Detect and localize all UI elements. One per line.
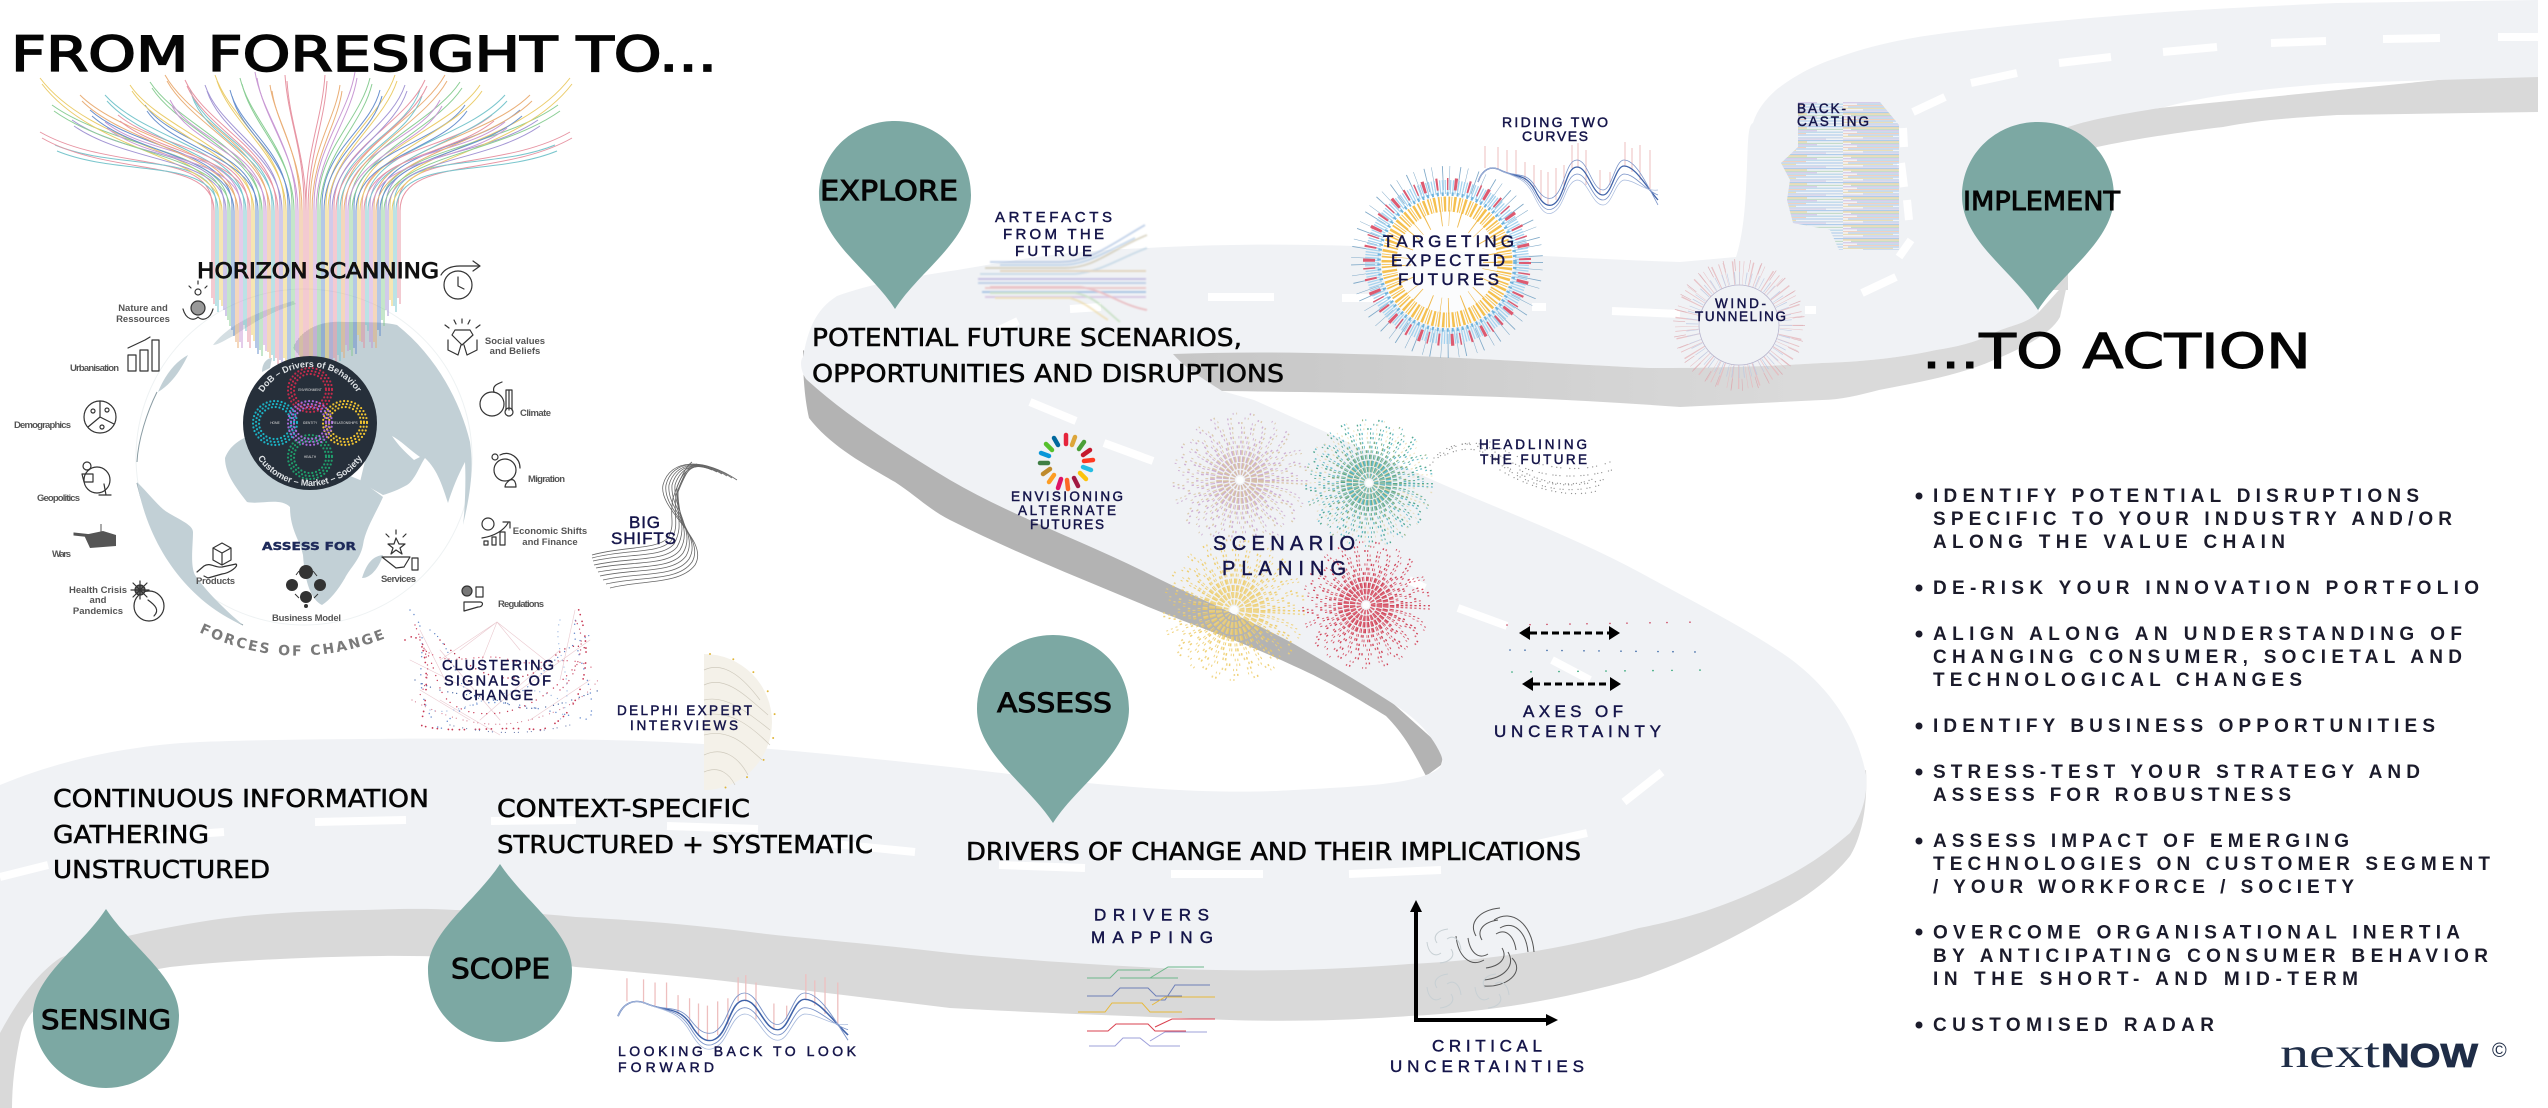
label: forces of change arc: FORCES OF CHANGE xyxy=(200,623,384,656)
assess for: heading: ASSESS FOR xyxy=(262,540,357,553)
label: clustering signals of change: CHANGE xyxy=(462,688,533,704)
diagram: drivers of behavior disc: RELATIONSHIPS xyxy=(332,421,358,425)
label: artefacts from the futrue: FUTRUE xyxy=(1015,243,1092,260)
road: centre line dashes xyxy=(0,37,2538,877)
label: clustering signals of change xyxy=(442,658,554,704)
logo: nextnow xyxy=(2280,1031,2507,1077)
forces of change: urbanisation xyxy=(70,337,159,374)
pin: implement: IMPLEMENT xyxy=(1963,187,2120,217)
label: wind-tunneling xyxy=(1695,296,1786,324)
label: headlining the future: HEADLINING xyxy=(1479,437,1587,452)
label: big shifts xyxy=(611,513,676,548)
label: targeting expected futures: FUTURES xyxy=(1398,270,1499,289)
list: benefits: CUSTOMISED RADAR xyxy=(1933,1015,2214,1036)
label: critical uncertainties: UNCERTAINTIES xyxy=(1390,1057,1584,1076)
text: context-specific: CONTEXT-SPECIFIC xyxy=(497,794,750,823)
label: looking back to look forward: LOOKING BACK TO LOOK xyxy=(618,1043,857,1059)
chart: drivers mapping circuit lines xyxy=(1078,967,1215,1046)
forces of change: demographics xyxy=(14,401,116,433)
pin: assess xyxy=(977,635,1129,823)
road: side band of top right road xyxy=(2030,70,2538,290)
forces of change: health crisis and pandemics xyxy=(69,581,164,621)
diagram: drivers of behavior disc: HEALTH xyxy=(304,455,317,459)
forces of change: health crisis and pandemics: Pandemics xyxy=(73,606,123,617)
label: targeting expected futures: EXPECTED xyxy=(1391,251,1505,270)
forces of change: nature and ressources xyxy=(116,281,213,325)
forces of change: regulations: Regulations xyxy=(498,599,544,610)
label: envisioning alternate futures xyxy=(1011,489,1123,532)
text: continuous information xyxy=(53,784,429,884)
chart: big shifts wave xyxy=(592,462,737,588)
chart: targeting expected futures xyxy=(1363,178,1531,346)
logo: nextnow: © xyxy=(2492,1040,2507,1062)
forces of change: geopolitics xyxy=(37,462,111,504)
assess for: business model: Business Model xyxy=(272,613,341,624)
list: benefits: ASSESS IMPACT OF EMERGING xyxy=(1933,831,2349,852)
label: artefacts from the futrue: FROM THE xyxy=(1003,226,1104,243)
assess for: business model xyxy=(272,565,341,624)
text: potential future scenarios: OPPORTUNITIES AND DISRUPTIONS xyxy=(812,359,1284,388)
title: to action: ...TO ACTION xyxy=(1922,324,2311,380)
pin: scope xyxy=(428,864,572,1042)
label: axes of uncertainty: UNCERTAINTY xyxy=(1494,722,1661,741)
label: envisioning alternate futures: ENVISIONING xyxy=(1011,489,1123,504)
label: artefacts from the futrue: ARTEFACTS xyxy=(995,209,1112,226)
label: delphi expert interviews xyxy=(617,703,752,733)
label: clustering signals of change: SIGNALS OF xyxy=(444,674,551,690)
chart: looking back to look forward xyxy=(618,974,848,1049)
diagram: drivers of behavior disc xyxy=(243,356,377,490)
text: continuous information: CONTINUOUS INFORMATION xyxy=(53,784,429,813)
pin: assess: ASSESS xyxy=(997,688,1112,719)
forces of change: social values and beliefs xyxy=(445,319,545,357)
text: potential future scenarios xyxy=(812,323,1284,388)
chart: headlining the future xyxy=(1430,442,1612,494)
assess for: products xyxy=(196,543,237,587)
label: riding two curves: CURVES xyxy=(1522,128,1588,144)
forces of change: economic shifts and finance: and Finance xyxy=(522,537,578,548)
label: delphi expert interviews: DELPHI EXPERT xyxy=(617,703,752,718)
road: side band of diagonal xyxy=(803,350,1445,776)
chart: scenario firework purple xyxy=(1170,410,1310,550)
pin: implement xyxy=(1962,122,2120,310)
label: targeting expected futures: TARGETING xyxy=(1383,232,1514,251)
label: drivers mapping xyxy=(1091,906,1213,947)
label: envisioning alternate futures: ALTERNATE xyxy=(1018,503,1116,518)
label: delphi expert interviews: INTERVIEWS xyxy=(630,718,738,733)
label: wind-tunneling: TUNNELING xyxy=(1695,309,1786,324)
label: headlining the future xyxy=(1479,437,1587,467)
text: continuous information: GATHERING xyxy=(53,820,209,849)
title: from foresight to: FROM FORESIGHT TO... xyxy=(11,27,717,83)
list: benefits: / YOUR WORKFORCE / SOCIETY xyxy=(1933,877,2354,898)
list: benefits: STRESS-TEST YOUR STRATEGY AND xyxy=(1933,762,2420,783)
icon: clock with arrow xyxy=(441,261,480,299)
list: benefits: ALIGN ALONG AN UNDERSTANDING OF xyxy=(1933,624,2462,645)
forces of change: climate xyxy=(480,382,551,419)
label: back-casting: BACK- xyxy=(1797,101,1846,116)
list: benefits: IDENTIFY BUSINESS OPPORTUNITIES xyxy=(1933,716,2435,737)
list: benefits: TECHNOLOGIES ON CUSTOMER SEGMENT xyxy=(1933,854,2490,875)
label: big shifts: BIG xyxy=(629,513,660,532)
label: headlining the future: THE FUTURE xyxy=(1480,452,1587,467)
logo: nextnow: NOW xyxy=(2381,1037,2479,1074)
icon: globe xyxy=(136,289,472,625)
logo: nextnow: next xyxy=(2280,1031,2380,1077)
list: benefits: IDENTIFY POTENTIAL DISRUPTIONS xyxy=(1933,486,2419,507)
label: looking back to look forward: FORWARD xyxy=(618,1059,714,1075)
chart: scenario firework teal xyxy=(1288,402,1450,564)
text: potential future scenarios: POTENTIAL FUTURE SCENARIOS, xyxy=(812,323,1242,352)
forces of change: wars: Wars xyxy=(52,549,71,560)
label: looking back to look forward xyxy=(618,1043,857,1075)
label: back-casting: CASTING xyxy=(1797,114,1869,129)
chart: backcasting head xyxy=(1780,100,1900,252)
pin: sensing: SENSING xyxy=(41,1005,171,1036)
forces of change: migration xyxy=(492,453,565,487)
diagram: drivers of behavior disc: IDENTITY xyxy=(303,421,318,425)
chart: horizon scanning fan of lines xyxy=(40,72,572,378)
list: benefits: OVERCOME ORGANISATIONAL INERTIA xyxy=(1933,922,2460,944)
forces of change: economic shifts and finance: Economic Shifts xyxy=(513,526,587,537)
icon: envisioning alternate futures ring xyxy=(1040,435,1093,489)
forces of change: demographics: Demographics xyxy=(14,420,71,431)
label: clustering signals of change: CLUSTERING xyxy=(442,658,554,674)
chart: clustering signals of change xyxy=(405,600,600,735)
pin: explore: EXPLORE xyxy=(820,174,958,207)
label: drivers mapping: DRIVERS xyxy=(1094,906,1209,924)
forces of change: social values and beliefs: Social values xyxy=(485,336,545,347)
text: continuous information: UNSTRUCTURED xyxy=(53,855,270,884)
diagram: drivers of behavior disc: DoB – Drivers of Behavior xyxy=(258,362,361,392)
list: benefits: ASSESS FOR ROBUSTNESS xyxy=(1933,785,2291,806)
label: axes of uncertainty: AXES OF xyxy=(1523,702,1623,721)
heading: horizon scanning: HORIZON SCANNING xyxy=(197,259,439,283)
forces of change: nature and ressources: Ressources xyxy=(116,314,170,325)
assess for: services xyxy=(381,530,418,585)
forces of change: urbanisation: Urbanisation xyxy=(70,363,119,374)
label: envisioning alternate futures: FUTURES xyxy=(1030,517,1104,532)
road: side band of lower road xyxy=(0,770,1866,1108)
forces of change: health crisis and pandemics: and xyxy=(90,595,107,606)
label: big shifts: SHIFTS xyxy=(611,529,676,548)
forces of change: economic shifts and finance xyxy=(482,518,587,548)
pin: scope: SCOPE xyxy=(451,952,550,985)
diagram: drivers of behavior disc: Customer – Market – Society xyxy=(258,455,362,486)
forces of change: wars xyxy=(52,524,116,560)
chart: scenario firework yellow xyxy=(1160,536,1308,684)
label: artefacts from the futrue xyxy=(995,209,1112,260)
road: side band of upper road xyxy=(1173,280,2068,407)
list: benefits: DE-RISK YOUR INNOVATION PORTFOLIO xyxy=(1933,578,2479,599)
forces of change: nature and ressources: Nature and xyxy=(118,303,168,314)
pin: explore xyxy=(819,121,971,309)
forces of change: health crisis and pandemics: Health Crisis xyxy=(69,585,127,596)
list: benefits: CHANGING CONSUMER, SOCIETAL AND xyxy=(1933,647,2462,668)
forces of change: migration: Migration xyxy=(528,474,565,485)
label: scenario planing xyxy=(1213,533,1355,580)
chart: critical uncertainties axes and swirls xyxy=(1410,900,1558,1026)
label: drivers mapping: MAPPING xyxy=(1091,928,1213,947)
chart: axes of uncertainty xyxy=(1507,622,1710,691)
list: benefits: TECHNOLOGICAL CHANGES xyxy=(1933,670,2302,691)
forces of change: social values and beliefs: and Beliefs xyxy=(490,346,540,357)
chart: delphi expert half circle xyxy=(704,654,775,790)
label: scenario planing: SCENARIO xyxy=(1213,533,1355,555)
chart: scenario firework red xyxy=(1300,539,1432,671)
text: context-specific: STRUCTURED + SYSTEMATIC xyxy=(497,830,873,859)
list: benefits: ALONG THE VALUE CHAIN xyxy=(1933,532,2285,553)
text: drivers of change: DRIVERS OF CHANGE AND THEIR IMPLICATIONS xyxy=(966,837,1581,866)
label: riding two curves xyxy=(1502,114,1608,144)
label: axes of uncertainty xyxy=(1494,702,1661,741)
pin: sensing xyxy=(33,909,179,1088)
label: critical uncertainties: CRITICAL xyxy=(1432,1036,1542,1056)
label: back-casting xyxy=(1797,101,1869,129)
chart: riding two curves xyxy=(1478,142,1658,214)
label: wind-tunneling: WIND- xyxy=(1715,296,1766,311)
diagram: drivers of behavior disc: ENVIRONMENT xyxy=(298,388,322,392)
list: benefits: IN THE SHORT- AND MID-TERM xyxy=(1933,969,2358,990)
forces of change: regulations xyxy=(462,586,544,611)
diagram: drivers of behavior disc: HOME xyxy=(270,421,280,425)
assess for: products: Products xyxy=(196,576,235,587)
chart: artefacts from the future xyxy=(978,225,1147,322)
label: riding two curves: RIDING TWO xyxy=(1502,114,1608,130)
list: benefits: SPECIFIC TO YOUR INDUSTRY AND/OR xyxy=(1933,509,2452,530)
chart: wind-tunneling ring xyxy=(1679,265,1799,385)
forces of change: geopolitics: Geopolitics xyxy=(37,493,80,504)
assess for: services: Services xyxy=(381,574,416,585)
text: context-specific xyxy=(497,794,873,859)
list: benefits: BY ANTICIPATING CONSUMER BEHAVIOR xyxy=(1933,946,2488,967)
forces of change: climate: Climate xyxy=(520,408,551,419)
label: targeting expected futures xyxy=(1383,232,1514,289)
label: critical uncertainties xyxy=(1390,1036,1584,1076)
list: benefits xyxy=(1916,486,2490,1036)
label: scenario planing: PLANING xyxy=(1222,558,1346,580)
